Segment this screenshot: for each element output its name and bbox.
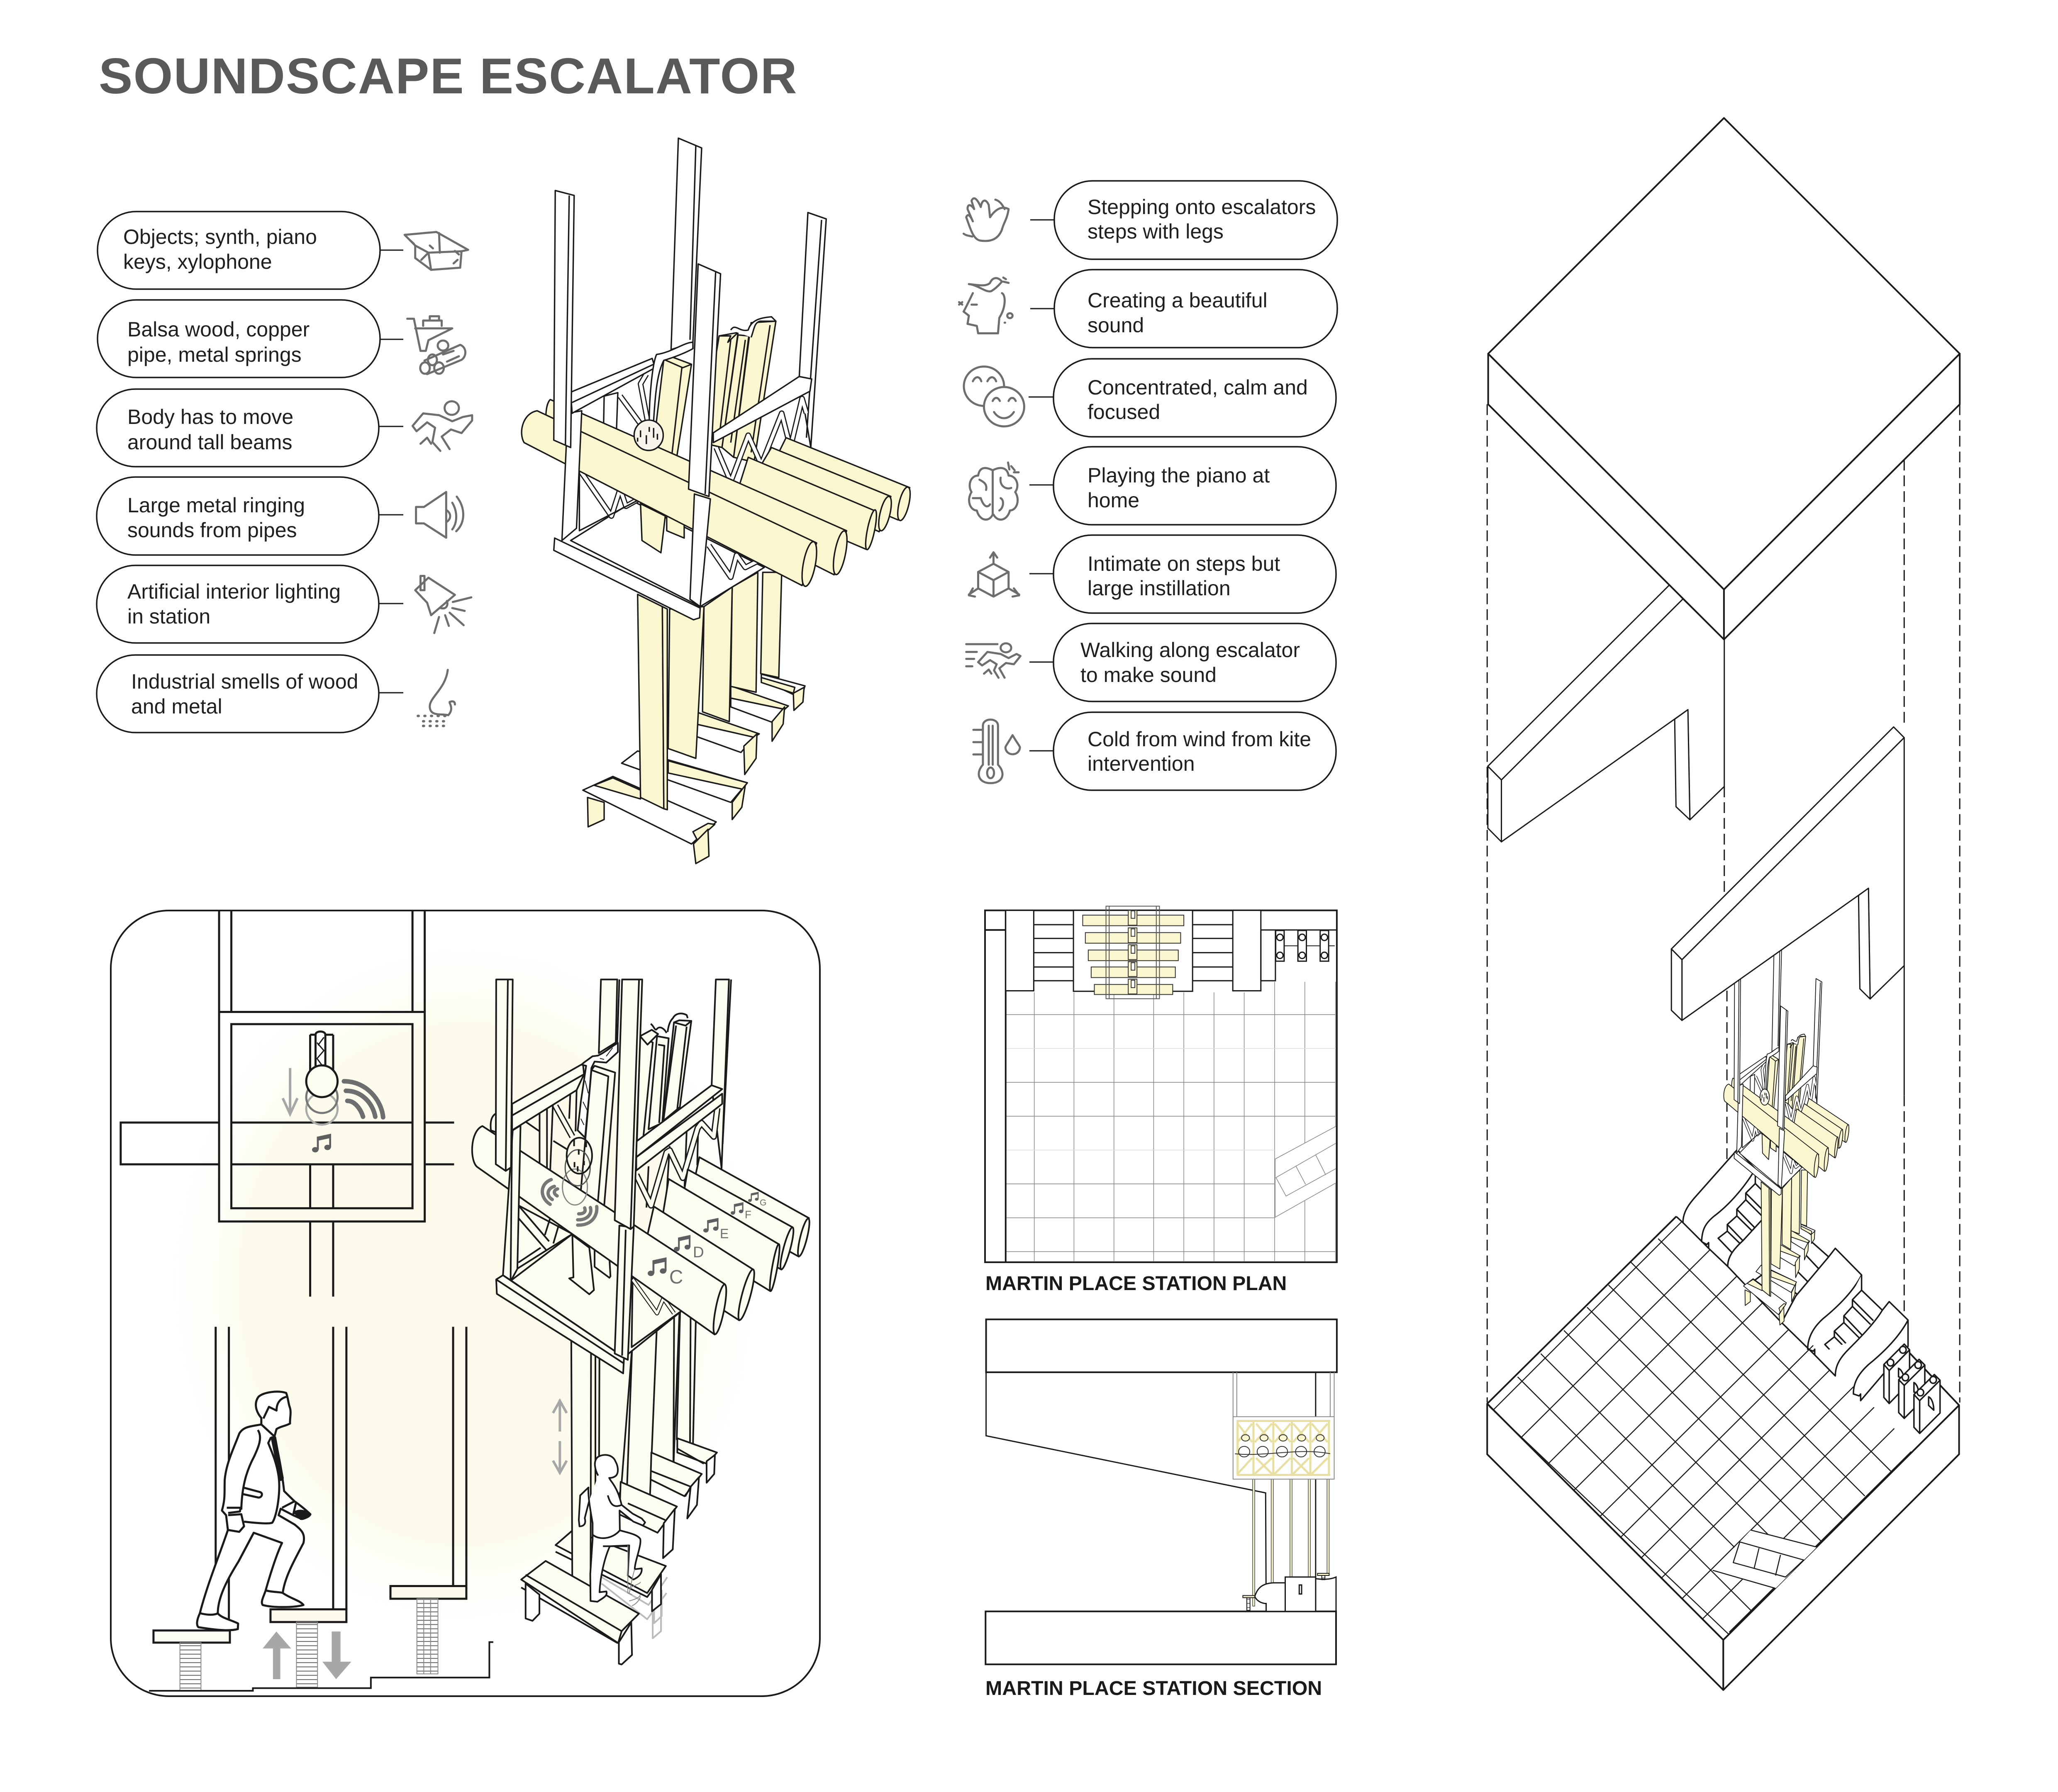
label: walking xyxy=(1029,623,1336,701)
log 4 xyxy=(680,1169,796,1270)
ticket gate 3 xyxy=(1914,1375,1940,1433)
exploded axonometric: guide lines xyxy=(1487,404,1960,1402)
note letters: E xyxy=(720,1226,729,1241)
pipes xyxy=(1235,1435,1330,1457)
escalator balustrade 4 xyxy=(1815,1302,1908,1401)
label: scale: Intimate on steps but xyxy=(1088,552,1280,575)
back right post xyxy=(712,979,729,1169)
label: piano: Playing the piano at xyxy=(1088,464,1270,487)
arrow: step up xyxy=(263,1631,291,1679)
label: objects: keys, xylophone xyxy=(123,250,272,273)
label: calm: Concentrated, calm and xyxy=(1088,376,1308,399)
label: materials: pipe, metal springs xyxy=(127,343,302,366)
label: stepping: Stepping onto escalators xyxy=(1088,195,1316,219)
hammer xyxy=(306,1032,338,1097)
hammers xyxy=(1128,911,1137,994)
log 1 xyxy=(472,1126,729,1335)
label: objects xyxy=(98,212,403,289)
bench 2 xyxy=(556,1530,666,1593)
hammer ghosts xyxy=(306,1081,338,1125)
centre frame xyxy=(1106,906,1159,999)
upper bars xyxy=(512,1064,722,1171)
icon: running figure xyxy=(412,401,472,451)
log 5 xyxy=(691,1157,812,1257)
notes on pipes xyxy=(648,1192,758,1276)
panel border xyxy=(111,911,820,1696)
label: beautiful sound xyxy=(1030,270,1337,348)
base block xyxy=(1487,1207,1959,1690)
label: smell: and metal xyxy=(131,695,222,718)
ticket gates xyxy=(1276,930,1335,961)
platform xyxy=(511,1234,683,1357)
label: piano xyxy=(1029,447,1336,525)
rear log stub xyxy=(491,1113,505,1136)
icon: nose xyxy=(418,670,455,726)
escalators xyxy=(1006,911,1337,991)
icon: wheelbarrow and logs xyxy=(407,316,466,374)
panel background xyxy=(111,911,820,1696)
icon: loudspeaker xyxy=(416,492,463,538)
stair treads left xyxy=(1709,1169,1848,1322)
title: SOUNDSCAPE ESCALATOR xyxy=(99,48,798,104)
label: scale xyxy=(1029,535,1336,613)
label: piano: home xyxy=(1088,489,1139,512)
label: calm: focused xyxy=(1088,400,1160,424)
icon: two faces xyxy=(964,367,1024,426)
label: materials: Balsa wood, copper xyxy=(127,318,310,341)
log 3 xyxy=(661,1179,781,1292)
icon: spotlight xyxy=(415,576,471,633)
label: beautiful sound: sound xyxy=(1088,314,1144,337)
truss xyxy=(1237,1421,1330,1475)
label: lighting xyxy=(97,565,403,643)
plan label: MARTIN PLACE STATION PLAN xyxy=(985,1272,1287,1295)
label: cold: intervention xyxy=(1088,752,1195,775)
panel: right experience labels xyxy=(1029,181,1337,790)
arrow: hammer down xyxy=(283,1068,297,1114)
figure: man stepping xyxy=(197,1392,310,1630)
label: cold: Cold from wind from kite xyxy=(1088,728,1311,751)
exploded axonometric: roof slab and beams xyxy=(1488,118,1960,1020)
note letters: G xyxy=(760,1198,766,1208)
label: objects: Objects; synth, piano xyxy=(123,225,317,248)
label: lighting: Artificial interior lighting xyxy=(127,580,341,603)
escalators and gates in axonometric xyxy=(1676,1150,1940,1433)
stair treads right xyxy=(1825,1275,1889,1360)
front elevation: steps and springs xyxy=(149,1327,493,1691)
panel: left icons xyxy=(405,232,472,726)
label: stepping xyxy=(1030,181,1337,259)
left truss xyxy=(526,1090,577,1171)
frame xyxy=(1233,1417,1334,1479)
label: beautiful sound: Creating a beautiful xyxy=(1088,289,1268,312)
person xyxy=(579,1455,645,1602)
piano key benches xyxy=(619,1438,717,1558)
label: calm xyxy=(1029,359,1336,437)
label: body: around tall beams xyxy=(127,431,292,454)
exploded axonometric: station base xyxy=(1487,1207,1959,1690)
arrow: step down xyxy=(322,1631,351,1679)
isometric columns at back xyxy=(595,1265,697,1551)
icon: running with speed lines xyxy=(966,643,1021,678)
hanging board xyxy=(581,1066,615,1206)
beam B xyxy=(1671,727,1904,1020)
icon: waving hand xyxy=(963,198,1009,241)
label: body xyxy=(97,389,403,467)
base beam xyxy=(496,1275,624,1373)
note letters: C xyxy=(669,1266,683,1288)
label: scale: large instillation xyxy=(1088,577,1231,600)
floor grid xyxy=(1006,982,1336,1261)
label: sound xyxy=(97,477,403,555)
ceiling and wall xyxy=(986,1372,1266,1612)
centre shaft and hole xyxy=(569,1235,610,1294)
bench 1 xyxy=(521,1561,639,1643)
label: materials xyxy=(98,300,403,377)
rope xyxy=(578,1043,618,1138)
panel: left sense labels xyxy=(97,212,403,733)
ghost steps xyxy=(602,1577,667,1638)
icon: head with bird xyxy=(959,278,1012,334)
label: lighting: in station xyxy=(127,605,210,628)
keys xyxy=(1083,915,1184,994)
back mid post xyxy=(599,979,617,1053)
mini tower in axonometric xyxy=(1724,939,1850,1325)
ticket gate 2 xyxy=(1899,1359,1925,1418)
step and spring xyxy=(1243,1573,1329,1610)
log 2 xyxy=(642,1206,757,1321)
escalator balustrade 1 xyxy=(1683,1150,1755,1248)
slabs xyxy=(985,1320,1337,1664)
music note xyxy=(312,1134,331,1152)
label: sound: sounds from pipes xyxy=(127,519,297,542)
label: body: Body has to move xyxy=(127,405,293,429)
label: smell xyxy=(97,655,403,733)
icon: cube arrows xyxy=(969,552,1019,597)
stair void xyxy=(1275,1126,1336,1217)
label: cold xyxy=(1029,712,1336,790)
panel: right icons xyxy=(959,198,1024,783)
hammer and ghosts xyxy=(563,1138,592,1205)
beam A xyxy=(1488,584,1724,842)
label: smell: Industrial smells of wood xyxy=(131,670,358,693)
main tower illustration xyxy=(522,138,913,864)
front post xyxy=(615,979,642,1360)
note letters: D xyxy=(693,1244,704,1261)
isometric tower in panel xyxy=(472,979,812,1373)
left post xyxy=(496,979,521,1281)
posts xyxy=(1233,1372,1334,1417)
station section xyxy=(985,1320,1337,1664)
note letters: F xyxy=(745,1208,751,1221)
icon: thermometer xyxy=(973,720,1020,783)
top slab xyxy=(1488,118,1960,640)
stair void xyxy=(1713,1530,1817,1588)
sound waves xyxy=(344,1081,383,1117)
ghost feet xyxy=(628,1546,640,1606)
steps and person xyxy=(521,1256,717,1665)
floor edge at escalators xyxy=(1676,1217,1782,1322)
main column xyxy=(571,1256,591,1596)
label: sound: Large metal ringing xyxy=(127,494,305,517)
yellow rods xyxy=(1253,1479,1329,1606)
lower truss right xyxy=(632,1275,683,1347)
station plan xyxy=(985,906,1337,1262)
front elevation: hammer frame xyxy=(121,911,454,1297)
escalator balustrade 2 xyxy=(1728,1219,1763,1286)
escalator and gate xyxy=(1255,1577,1336,1612)
icon: brain xyxy=(969,463,1019,520)
floor grid xyxy=(1490,1222,1911,1635)
panel: rounded interaction diagram xyxy=(111,911,820,1696)
lower truss left xyxy=(517,1205,573,1269)
section label: MARTIN PLACE STATION SECTION xyxy=(985,1677,1322,1699)
ground line xyxy=(149,1642,493,1691)
label: stepping: steps with legs xyxy=(1088,220,1224,243)
ticket gate 1 xyxy=(1884,1344,1909,1403)
right truss xyxy=(636,1108,717,1212)
light glow xyxy=(211,990,714,1578)
plan outline xyxy=(985,911,1337,1262)
back boards xyxy=(637,1013,691,1142)
sound waves xyxy=(542,1180,597,1225)
arrows: up and down xyxy=(553,1400,567,1473)
note letters xyxy=(669,1198,766,1288)
escalator balustrade 3 xyxy=(1782,1248,1862,1355)
label: walking: Walking along escalator xyxy=(1080,638,1300,662)
label: walking: to make sound xyxy=(1080,663,1217,687)
icon: open box xyxy=(405,232,468,270)
